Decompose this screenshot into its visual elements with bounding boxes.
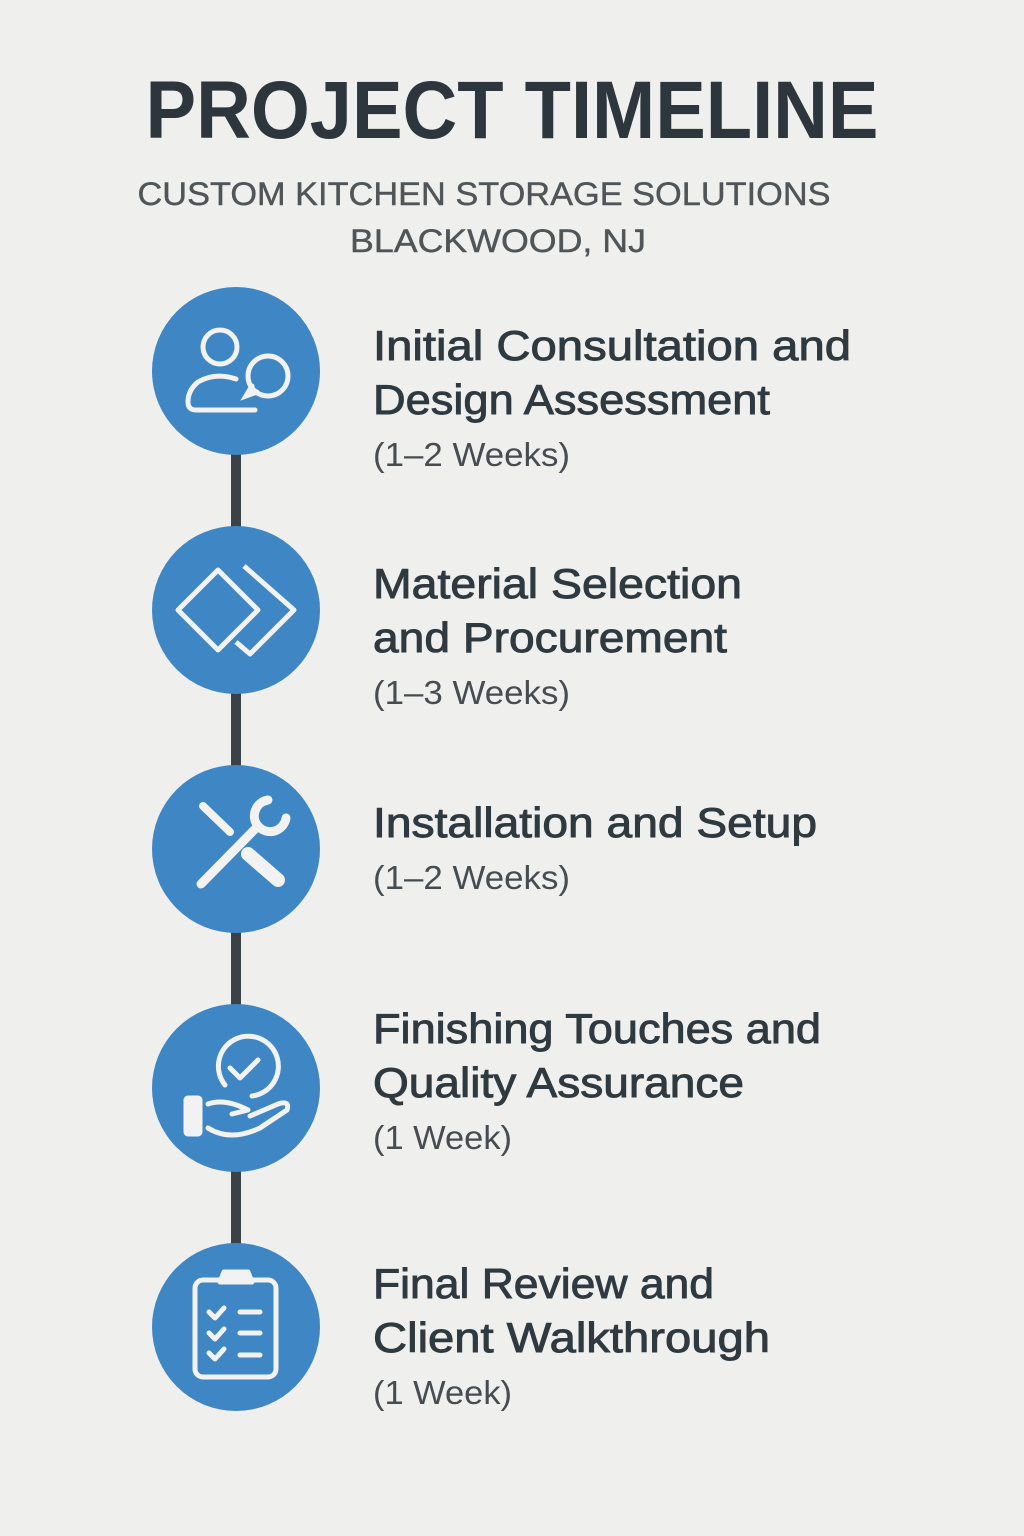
step 3 [152,765,817,933]
text: step 3: (1–2 Weeks) [373,859,570,896]
text: step 2: and Procurement [373,614,727,661]
text: step 1: Initial Consultation and [373,322,851,369]
text: step 4: (1 Week) [373,1119,512,1156]
icon: clipboard checklist [152,1243,320,1411]
text: step 4: Finishing Touches and [373,1005,821,1052]
text: step 2: (1–3 Weeks) [373,674,570,711]
step 5 [152,1243,770,1411]
text: step 3 [373,799,817,896]
text: step 3: Installation and Setup [373,799,817,846]
text: step 5: Final Review and [373,1260,714,1307]
text: step 5: Client Walkthrough [373,1314,770,1361]
text: step 1: (1–2 Weeks) [373,436,570,473]
text: step 2 [373,560,742,711]
step 2 [152,526,742,711]
text: step 5: (1 Week) [373,1374,512,1411]
subtitle: CUSTOM KITCHEN STORAGE SOLUTIONS [138,176,830,212]
timeline connector [231,371,241,1327]
icon: materials [152,526,320,694]
step 1 [152,287,851,473]
text: step 1: Design Assessment [373,376,770,423]
icon: tools [152,765,320,933]
icon: consultation [152,287,320,455]
subtitle [138,176,830,259]
subtitle: BLACKWOOD, NJ [350,223,646,259]
step 4 [152,1004,821,1172]
text: step 2: Material Selection [373,560,742,607]
text: step 1 [373,322,851,473]
text: step 5 [373,1260,770,1411]
title: PROJECT TIMELINE [146,65,878,156]
text: step 4 [373,1005,821,1156]
text: step 4: Quality Assurance [373,1059,744,1106]
icon: quality assurance [152,1004,320,1172]
